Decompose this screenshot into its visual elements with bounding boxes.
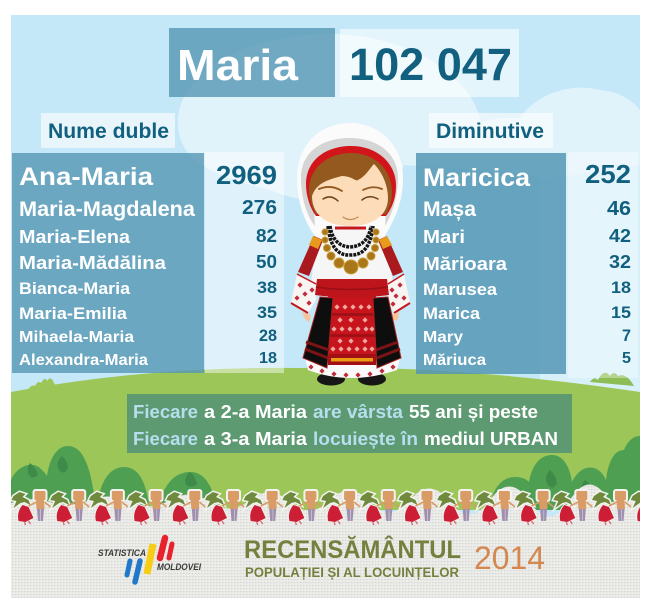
row: Alexandra-Maria: 18 — [259, 350, 277, 367]
row: Maricica: 252 — [585, 159, 631, 189]
row: Maria-Mădălina: Maria-Mădălina — [19, 252, 167, 273]
row: Ana-Maria — [19, 160, 277, 191]
row: Mașa — [423, 198, 631, 221]
row: Maria-Magdalena — [19, 197, 277, 221]
boots — [317, 372, 345, 386]
line 2 — [133, 428, 558, 449]
chain of dancers — [12, 491, 650, 525]
row: Marica — [423, 303, 631, 323]
row: Maria-Elena — [19, 225, 277, 247]
row: Bianca-Maria — [19, 278, 277, 298]
cloud: large centre — [178, 34, 640, 201]
left sleeve — [291, 236, 323, 322]
row: Marica: Marica — [423, 304, 481, 323]
row: Marica: 15 — [611, 303, 631, 322]
line 1: are vârsta — [313, 401, 404, 422]
logo bars — [127, 538, 172, 582]
line 2: a 3-a Maria — [204, 428, 308, 449]
row: Maria-Magdalena: 276 — [242, 197, 277, 219]
row: Mașa: 46 — [607, 198, 631, 220]
row: Maria-Elena: Maria-Elena — [19, 226, 131, 247]
row: Ana-Maria: Ana-Maria — [19, 163, 154, 191]
panel: diminutive table — [416, 152, 638, 378]
row: Măriuca — [423, 350, 631, 369]
row: Mari: Mari — [423, 226, 465, 247]
heading: Diminutive — [429, 113, 553, 148]
heading: Nume duble: Nume duble — [48, 120, 169, 143]
title: Maria: Maria — [177, 41, 299, 90]
grass tuft right — [590, 373, 634, 386]
row: Ana-Maria: 2969 — [216, 160, 277, 190]
fabric strip — [11, 484, 640, 598]
panel: nume duble table — [12, 152, 284, 373]
bushes right — [489, 436, 640, 510]
census year: 2014 — [474, 540, 545, 576]
heading: Diminutive: Diminutive — [436, 120, 544, 143]
row: Mărioara: Mărioara — [423, 253, 508, 274]
row: Alexandra-Maria: Alexandra-Maria — [19, 352, 148, 369]
line 2: mediul URBAN — [424, 428, 558, 449]
logo: Statistica Moldovei: STATISTICA — [98, 548, 146, 559]
right sleeve — [378, 236, 410, 320]
logo: Statistica Moldovei — [98, 538, 201, 582]
row: Mărioara — [423, 251, 631, 274]
row: Maricica — [423, 159, 631, 192]
row: Bianca-Maria: Bianca-Maria — [19, 279, 131, 298]
character: girl in Moldovan folk costume — [291, 123, 410, 386]
line 1: Fiecare — [133, 401, 198, 422]
row: Marusea: Marusea — [423, 280, 498, 299]
hem — [305, 358, 400, 378]
row: Mărioara: 32 — [609, 251, 631, 272]
row: Marusea: 18 — [611, 278, 631, 297]
row: Maria-Mădălina — [19, 251, 277, 273]
row: Mary: 7 — [622, 327, 631, 345]
eyebrows, eyes and mouth — [319, 187, 382, 220]
cloud: lower right — [540, 192, 640, 392]
row: Măriuca: 5 — [622, 350, 631, 367]
row: Măriuca: Măriuca — [423, 352, 486, 369]
row: Mari: 42 — [609, 225, 631, 246]
gold coins — [322, 229, 379, 274]
row: Maria-Emilia — [19, 303, 277, 323]
row: Mașa: Mașa — [423, 198, 476, 221]
hill — [11, 368, 640, 510]
values column background — [205, 152, 284, 373]
row: Mihaela-Maria: 28 — [259, 327, 277, 345]
census title — [244, 534, 461, 580]
logo: Statistica Moldovei: MOLDOVEI — [157, 562, 201, 573]
hood — [297, 123, 403, 240]
row: Maricica: Maricica — [423, 164, 531, 192]
row: Mihaela-Maria — [19, 327, 277, 346]
line 1 — [133, 401, 538, 422]
belt — [315, 279, 389, 298]
line 2: locuiește în — [313, 428, 418, 449]
names column background — [416, 153, 566, 374]
row: Mihaela-Maria: Mihaela-Maria — [19, 329, 134, 346]
line 1: 55 ani și peste — [409, 401, 538, 422]
row: Maria-Magdalena: Maria-Magdalena — [19, 198, 195, 221]
row: Mari — [423, 225, 631, 247]
skirt dark bands — [328, 313, 376, 365]
blouse — [311, 228, 393, 283]
row: Maria-Elena: 82 — [256, 225, 277, 246]
census title: POPULAȚIEI ȘI AL LOCUINȚELOR — [245, 565, 459, 580]
row: Maria-Mădălina: 50 — [256, 251, 277, 272]
line 2: Fiecare — [133, 428, 198, 449]
bushes left — [11, 446, 218, 510]
row: Bianca-Maria: 38 — [257, 278, 277, 297]
title: Maria — [169, 28, 335, 97]
hair — [309, 153, 392, 214]
row: Marusea — [423, 278, 631, 299]
total: 102 047 — [340, 29, 519, 97]
headband — [306, 146, 396, 216]
left apron — [303, 297, 333, 368]
census title: RECENSĂMÂNTUL — [244, 534, 461, 564]
row: Mary — [423, 327, 631, 346]
heading: Nume duble — [41, 113, 175, 148]
row: Mary: Mary — [423, 329, 463, 346]
row: Alexandra-Maria — [19, 350, 277, 369]
grass tuft left — [28, 378, 55, 389]
names column background — [12, 153, 204, 373]
skirt — [328, 296, 376, 365]
callout: facts — [127, 394, 572, 453]
values column background — [568, 152, 638, 378]
total: 102 047: 102 047 — [349, 39, 512, 90]
row: Maria-Emilia: Maria-Emilia — [19, 304, 128, 323]
face — [312, 164, 388, 226]
necklaces — [328, 226, 373, 255]
line 1: a 2-a Maria — [204, 401, 308, 422]
row: Maria-Emilia: 35 — [257, 303, 277, 322]
right apron — [373, 297, 401, 368]
